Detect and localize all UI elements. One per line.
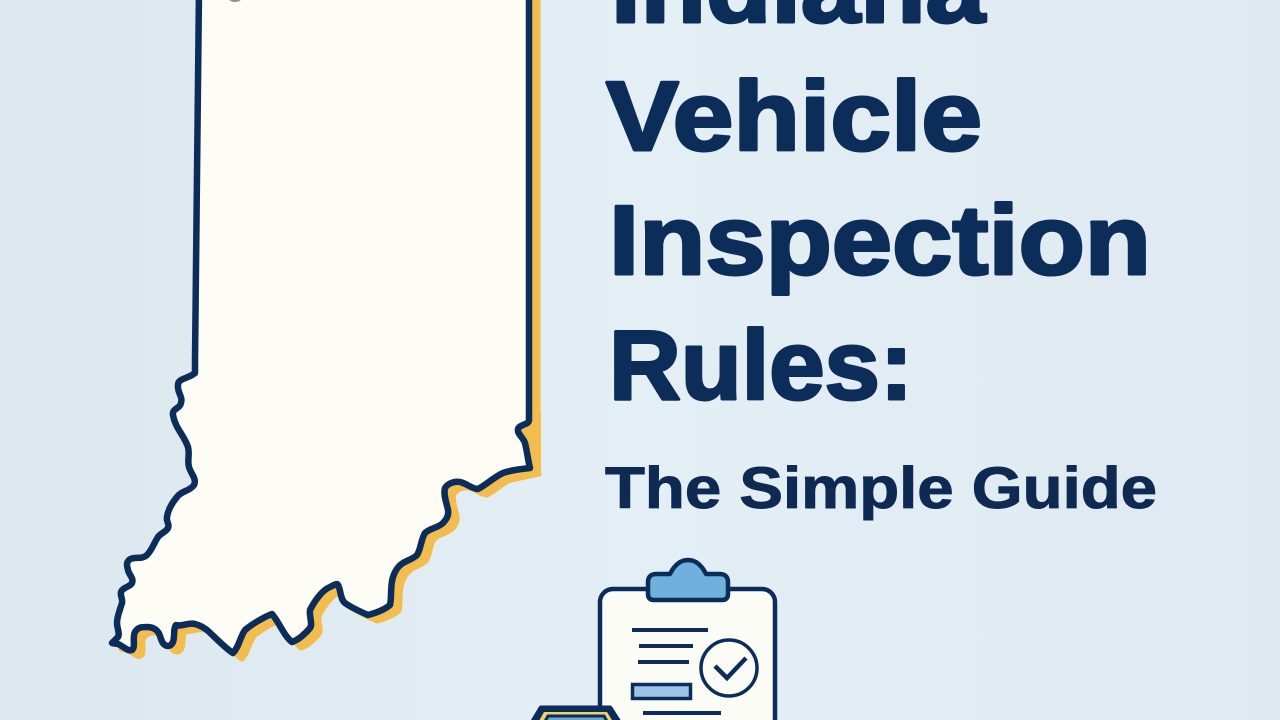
map: Indiana state outline bbox=[112, 0, 541, 659]
car roof gold trim bbox=[534, 712, 618, 720]
clipboard clip bbox=[648, 560, 728, 600]
map: cream state fill with navy border bbox=[112, 0, 530, 653]
title bbox=[606, 0, 1151, 420]
clipboard board bbox=[600, 589, 775, 720]
check mark badge bbox=[701, 640, 757, 696]
icon: car roof bbox=[528, 708, 624, 720]
icon: clipboard with checklist bbox=[600, 560, 775, 720]
checklist text lines bbox=[632, 630, 721, 713]
title line: Rules:: Rules: bbox=[609, 310, 913, 420]
title line: Inspection: Inspection bbox=[609, 185, 1151, 295]
map: gold shadow southeast corner bbox=[505, 410, 541, 484]
map: gold offset shadow bbox=[121, 0, 539, 659]
map: location marker remnant bbox=[229, 0, 241, 2]
highlighted checklist row bbox=[632, 684, 690, 698]
title line: Vehicle: Vehicle bbox=[606, 61, 982, 171]
car windshield bbox=[540, 716, 612, 720]
subtitle: The Simple Guide bbox=[605, 456, 1157, 521]
car roof outer outline bbox=[528, 708, 624, 720]
